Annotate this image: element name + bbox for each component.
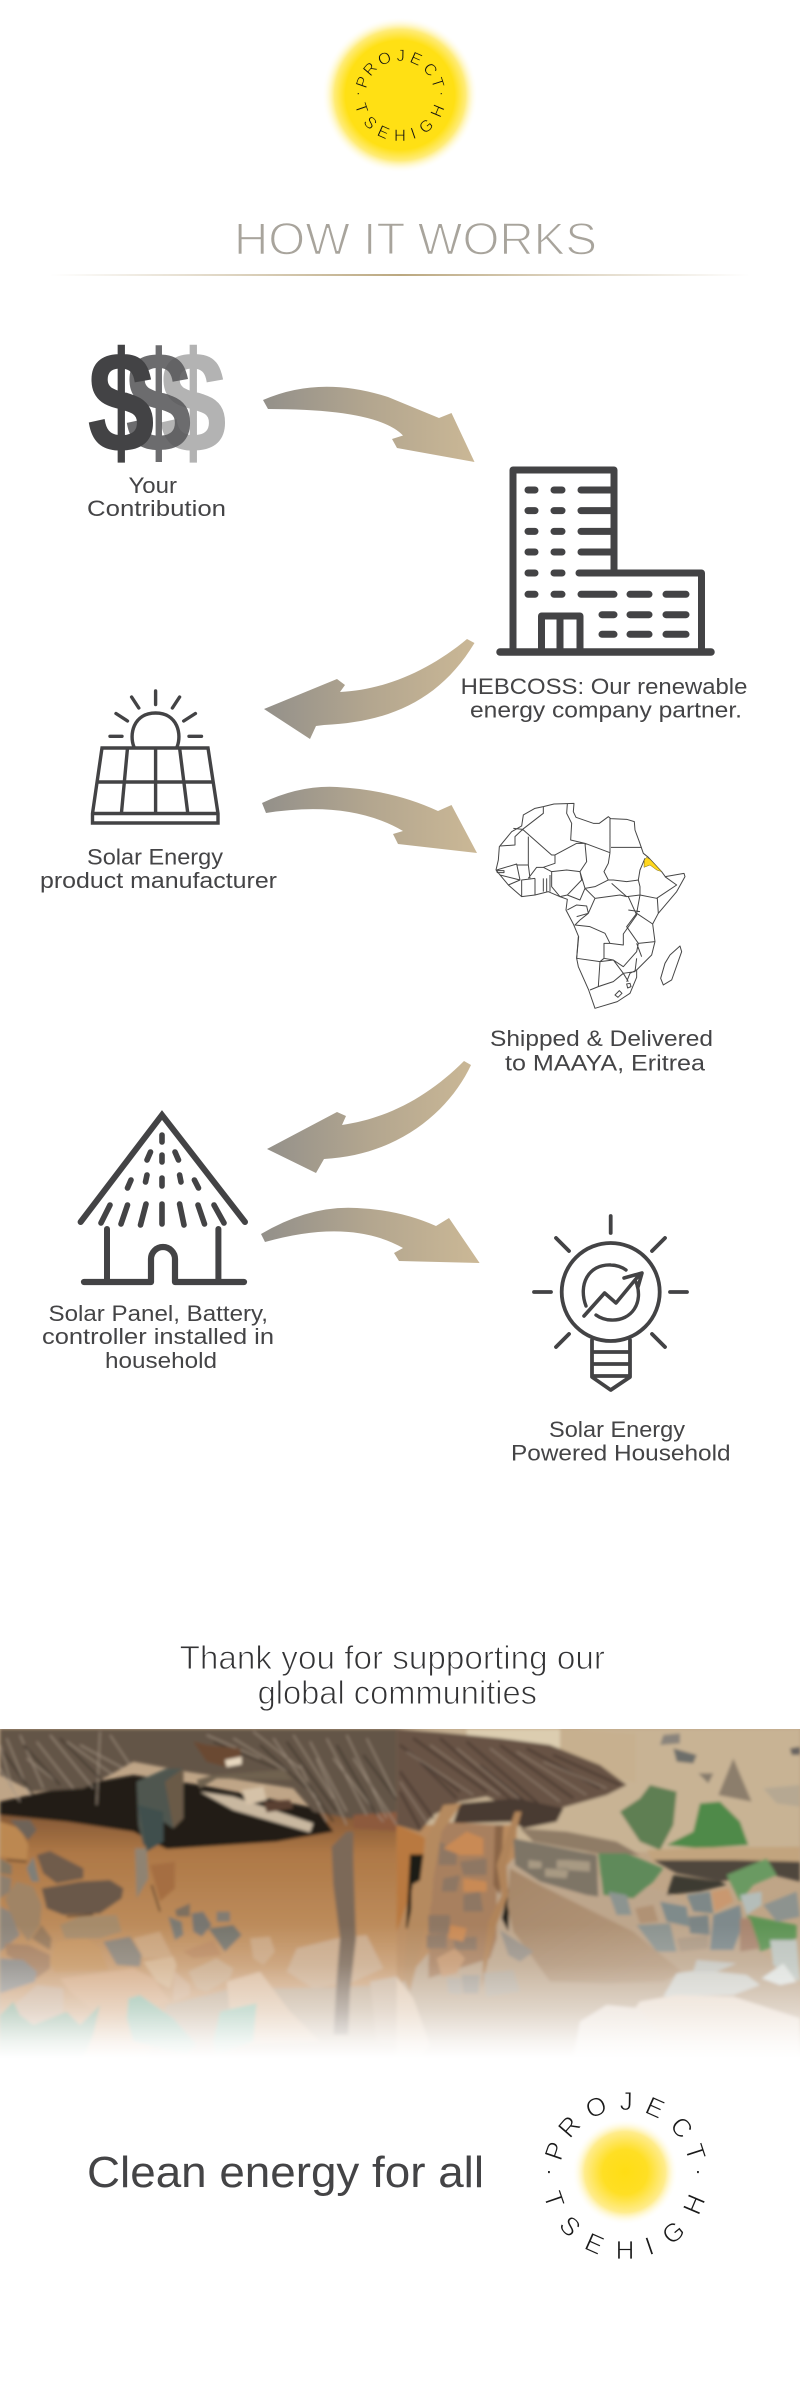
hill rocks — [673, 1748, 697, 1763]
circular logo lettering: T — [427, 75, 447, 90]
map: Africa with Eritrea highlighted — [496, 803, 685, 1008]
circular logo lettering: H — [427, 102, 449, 120]
Madagascar — [661, 946, 682, 985]
trunk — [332, 1832, 356, 2035]
thank you message — [180, 1639, 605, 1711]
photo bottom fade — [0, 1925, 800, 2058]
circular logo lettering: O — [375, 48, 394, 70]
boulder — [507, 1868, 682, 1983]
label: solar powered household — [511, 1417, 731, 1466]
circular logo lettering: · — [355, 84, 361, 102]
tagline: Clean energy for all — [87, 2148, 484, 2197]
circular lettering: · — [545, 2155, 553, 2185]
icon: dollar signs: $ — [125, 322, 192, 482]
circular logo lettering: H — [394, 127, 406, 145]
label: your contribution: Your — [128, 473, 178, 498]
circular lettering: E — [580, 2226, 609, 2261]
bottom logo: sun with circular lettering — [537, 2086, 712, 2265]
label: your contribution — [87, 473, 226, 521]
icon: office building — [500, 470, 711, 652]
thank you message: Thank you for supporting our — [180, 1639, 605, 1676]
label: solar product manufacturer: Solar Energy — [87, 844, 224, 870]
Eritrea highlight — [644, 857, 662, 872]
label: HEBCOSS: energy company partner. — [470, 698, 742, 722]
label: shipped and delivered — [490, 1026, 713, 1076]
top logo: Project Tsehigh sun — [322, 17, 478, 173]
circular lettering: P — [538, 2138, 572, 2164]
circular lettering: H — [677, 2190, 712, 2219]
label: shipped and delivered: to MAAYA, Eritrea — [505, 1051, 706, 1076]
circular lettering: I — [641, 2231, 658, 2261]
circular logo lettering: J — [396, 47, 405, 65]
thank you message: global communities — [258, 1674, 537, 1711]
icon: dollar signs: $ — [88, 322, 154, 482]
label: panel, battery, controller: Solar Panel, Battery, — [48, 1301, 268, 1326]
label: HEBCOSS: HEBCOSS: Our renewable — [461, 674, 747, 699]
circular logo lettering: E — [375, 122, 392, 143]
photo: stone and mud hut with thatched roof — [0, 1729, 800, 2058]
foot stones — [500, 1930, 533, 1962]
label: your contribution: Contribution — [87, 496, 226, 521]
circular logo lettering: C — [419, 60, 441, 80]
icon: dollar signs — [88, 322, 226, 482]
circular logo lettering: T — [351, 101, 371, 116]
hut wall — [397, 1825, 425, 1932]
label: panel, battery, controller — [42, 1301, 274, 1373]
soft sun — [572, 2119, 678, 2225]
trunks — [403, 1803, 462, 1992]
stones — [0, 1822, 28, 1860]
circular lettering: T — [679, 2140, 712, 2164]
circular logo lettering — [351, 47, 449, 145]
label: solar product manufacturer: product manufacturer — [40, 868, 278, 893]
circular lettering: S — [553, 2210, 587, 2243]
icon: light bulb with growth arrow — [534, 1216, 687, 1390]
label: solar powered household: Powered Household — [511, 1441, 731, 1466]
label: panel, battery, controller: controller installed in — [42, 1324, 274, 1349]
circular lettering: R — [552, 2110, 587, 2143]
label: panel, battery, controller: household — [105, 1348, 217, 1373]
title divider — [50, 274, 750, 276]
circular logo lettering: P — [353, 74, 373, 90]
photo left half — [0, 1729, 403, 2058]
plants — [0, 2002, 100, 2046]
logs — [197, 1770, 293, 1788]
circular lettering: O — [581, 2089, 611, 2125]
bushes — [620, 1785, 677, 1850]
title: HOW IT WORKS — [234, 214, 597, 264]
arrow: Africa to household — [267, 1061, 471, 1173]
arrow: manufacturer to Africa — [262, 787, 477, 853]
circular logo lettering: G — [416, 116, 437, 138]
circular logo lettering: R — [360, 59, 381, 80]
low stones — [608, 1892, 632, 1915]
back thatch and wall — [520, 1828, 640, 1855]
arrow: HEBCOSS to manufacturer — [264, 639, 474, 739]
circular logo lettering: I — [408, 125, 419, 143]
circular lettering: G — [656, 2214, 691, 2250]
arrow: household to powered household — [261, 1208, 480, 1263]
circular lettering: E — [641, 2090, 669, 2125]
label: HEBCOSS — [461, 674, 747, 722]
hanging cloth — [137, 1768, 183, 1848]
photo right half — [397, 1729, 800, 2058]
circular logo lettering: S — [360, 113, 380, 133]
foreground rocks — [663, 1970, 760, 1997]
main thatch — [397, 1729, 627, 1832]
icon: thatched hut — [81, 1115, 245, 1282]
icon: dollar signs: $ — [160, 322, 226, 482]
icon: solar panel with sun — [92, 691, 218, 823]
ground — [168, 1986, 371, 2008]
circular lettering: · — [694, 2155, 702, 2185]
circular lettering: H — [616, 2235, 634, 2265]
label: shipped and delivered: Shipped & Delivered — [490, 1026, 713, 1051]
label: solar powered household: Solar Energy — [549, 1417, 686, 1442]
circular lettering — [537, 2086, 712, 2265]
circular lettering: C — [664, 2111, 699, 2144]
circular logo lettering: E — [407, 49, 425, 70]
label: solar product manufacturer — [40, 844, 278, 893]
sun disc — [322, 17, 478, 173]
arrow: contribution to HEBCOSS — [263, 387, 474, 462]
circular logo lettering: · — [439, 84, 444, 102]
circular lettering: T — [537, 2187, 571, 2212]
circular lettering: J — [620, 2086, 633, 2116]
